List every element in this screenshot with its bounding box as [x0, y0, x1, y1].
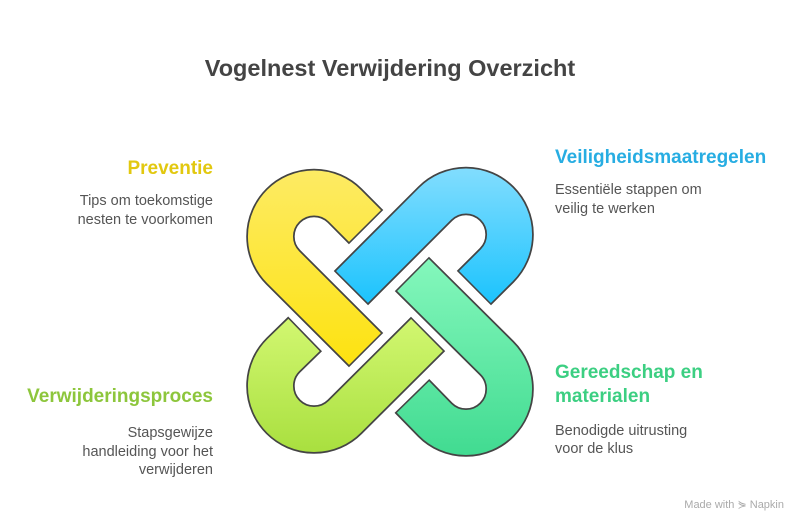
block: Gereedschap en materialen: Gereedschap en	[555, 362, 703, 383]
watermark: Made with ⋟ Napkin	[684, 499, 784, 511]
block: Preventie: Preventie	[127, 158, 213, 179]
block: Gereedschap en materialen: Benodigde uitrusting	[555, 423, 687, 439]
block: Gereedschap en materialen: materialen	[555, 386, 650, 407]
block: Veiligheidsmaatregelen: Essentiële stappen om	[555, 182, 702, 198]
link: green	[412, 274, 510, 433]
block: Preventie: nesten te voorkomen	[78, 212, 213, 228]
block: Verwijderingsproces: handleiding voor het	[82, 444, 213, 460]
link: blue	[351, 191, 510, 288]
block: Veiligheidsmaatregelen: veilig te werken	[555, 201, 655, 217]
block: Verwijderingsproces: Verwijderingsproces	[27, 386, 213, 407]
link: lime	[270, 334, 428, 430]
block: Preventie: Tips om toekomstige	[80, 193, 213, 209]
block: Preventie	[78, 158, 213, 228]
title: Vogelnest Verwijdering Overzicht	[205, 55, 575, 81]
block: Verwijderingsproces	[27, 386, 213, 478]
block: Verwijderingsproces: Stapsgewijze	[128, 425, 213, 441]
block: Gereedschap en materialen: voor de klus	[555, 441, 633, 457]
block: Verwijderingsproces: verwijderen	[139, 462, 213, 478]
graphic: interlocking links	[270, 191, 510, 433]
block: Veiligheidsmaatregelen: Veiligheidsmaatregelen	[555, 147, 766, 168]
block: Gereedschap en materialen	[555, 362, 703, 457]
link: yellow	[270, 193, 366, 350]
block: Veiligheidsmaatregelen	[555, 147, 766, 217]
